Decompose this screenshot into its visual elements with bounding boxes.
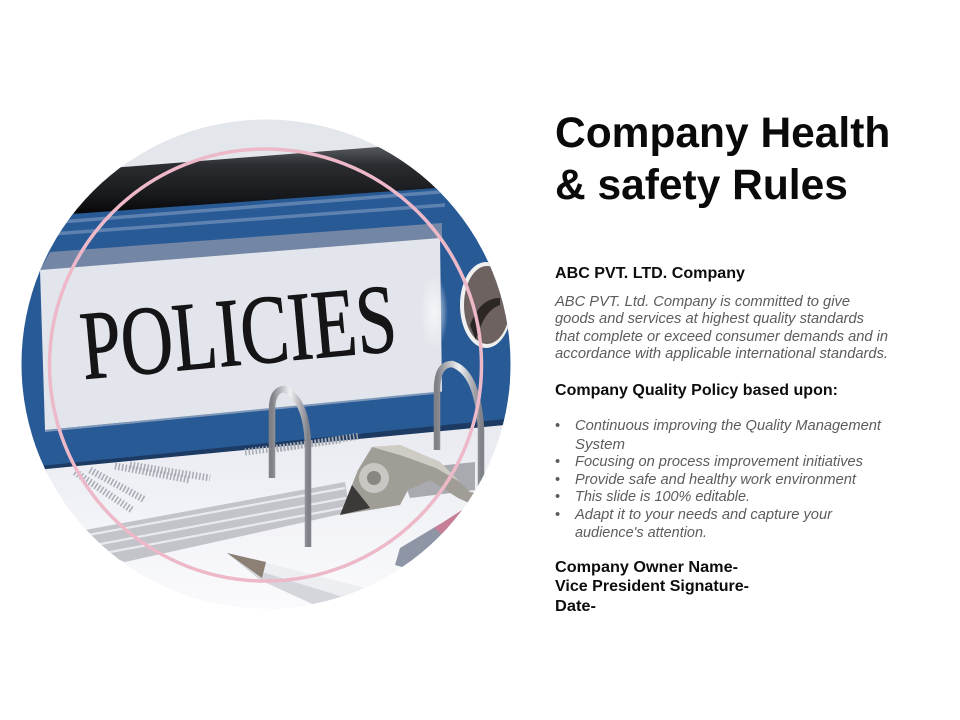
spine highlights (52, 192, 445, 234)
policy bullet list: Provide safe and healthy work environment (575, 472, 857, 488)
policy bullet list: Focusing on process improvement initiatives (575, 454, 864, 470)
metal lever mechanism (340, 445, 474, 515)
signature block: Company Owner Name- (555, 559, 738, 576)
pen (228, 553, 364, 604)
policy bullet list: • (555, 489, 560, 505)
company heading: ABC PVT. LTD. Company (555, 265, 745, 282)
right-hand ring (437, 364, 481, 492)
photo: policies binder in circle (15, 115, 520, 615)
signature block (555, 559, 749, 615)
company description (554, 294, 888, 362)
left-hand ring (272, 389, 308, 547)
grey label sleeve (40, 223, 442, 270)
policy bullet list: System (575, 437, 625, 453)
binder lower edge (15, 378, 515, 470)
pink ring outline (50, 149, 482, 581)
policy bullet list: Continuous improving the Quality Management (575, 418, 882, 434)
policy bullet list: This slide is 100% editable. (575, 489, 750, 505)
policy bullet list: Adapt it to your needs and capture your (574, 507, 833, 523)
policy bullet list: • (555, 418, 560, 434)
binder eyelet hole (460, 262, 512, 348)
policy bullet list: • (555, 507, 560, 523)
signature block: Vice President Signature- (555, 578, 749, 595)
POLICIES label text: POLICIES (76, 263, 401, 401)
calculator (395, 524, 448, 567)
policy bullet list: • (555, 472, 560, 488)
policy bullet list: • (555, 454, 560, 470)
policy bullet list: audience's attention. (575, 525, 707, 541)
stacked pages (85, 482, 350, 562)
company description: goods and services at highest quality standards (555, 311, 865, 327)
blue binder spine (15, 188, 515, 470)
white label (40, 238, 442, 430)
title: & safety Rules (555, 162, 848, 209)
company description: that complete or exceed consumer demands and in (555, 329, 888, 345)
company description: accordance with applicable international standards. (555, 346, 888, 362)
company description: ABC PVT. Ltd. Company is committed to give (554, 294, 850, 310)
printed table text on paper (75, 436, 360, 510)
policy bullet list (555, 418, 882, 541)
title (555, 110, 890, 209)
signature block: Date- (555, 598, 596, 615)
title: Company Health (555, 110, 890, 157)
black binder band (70, 147, 438, 218)
paper pages (45, 425, 502, 608)
policy heading: Company Quality Policy based upon: (555, 382, 838, 399)
